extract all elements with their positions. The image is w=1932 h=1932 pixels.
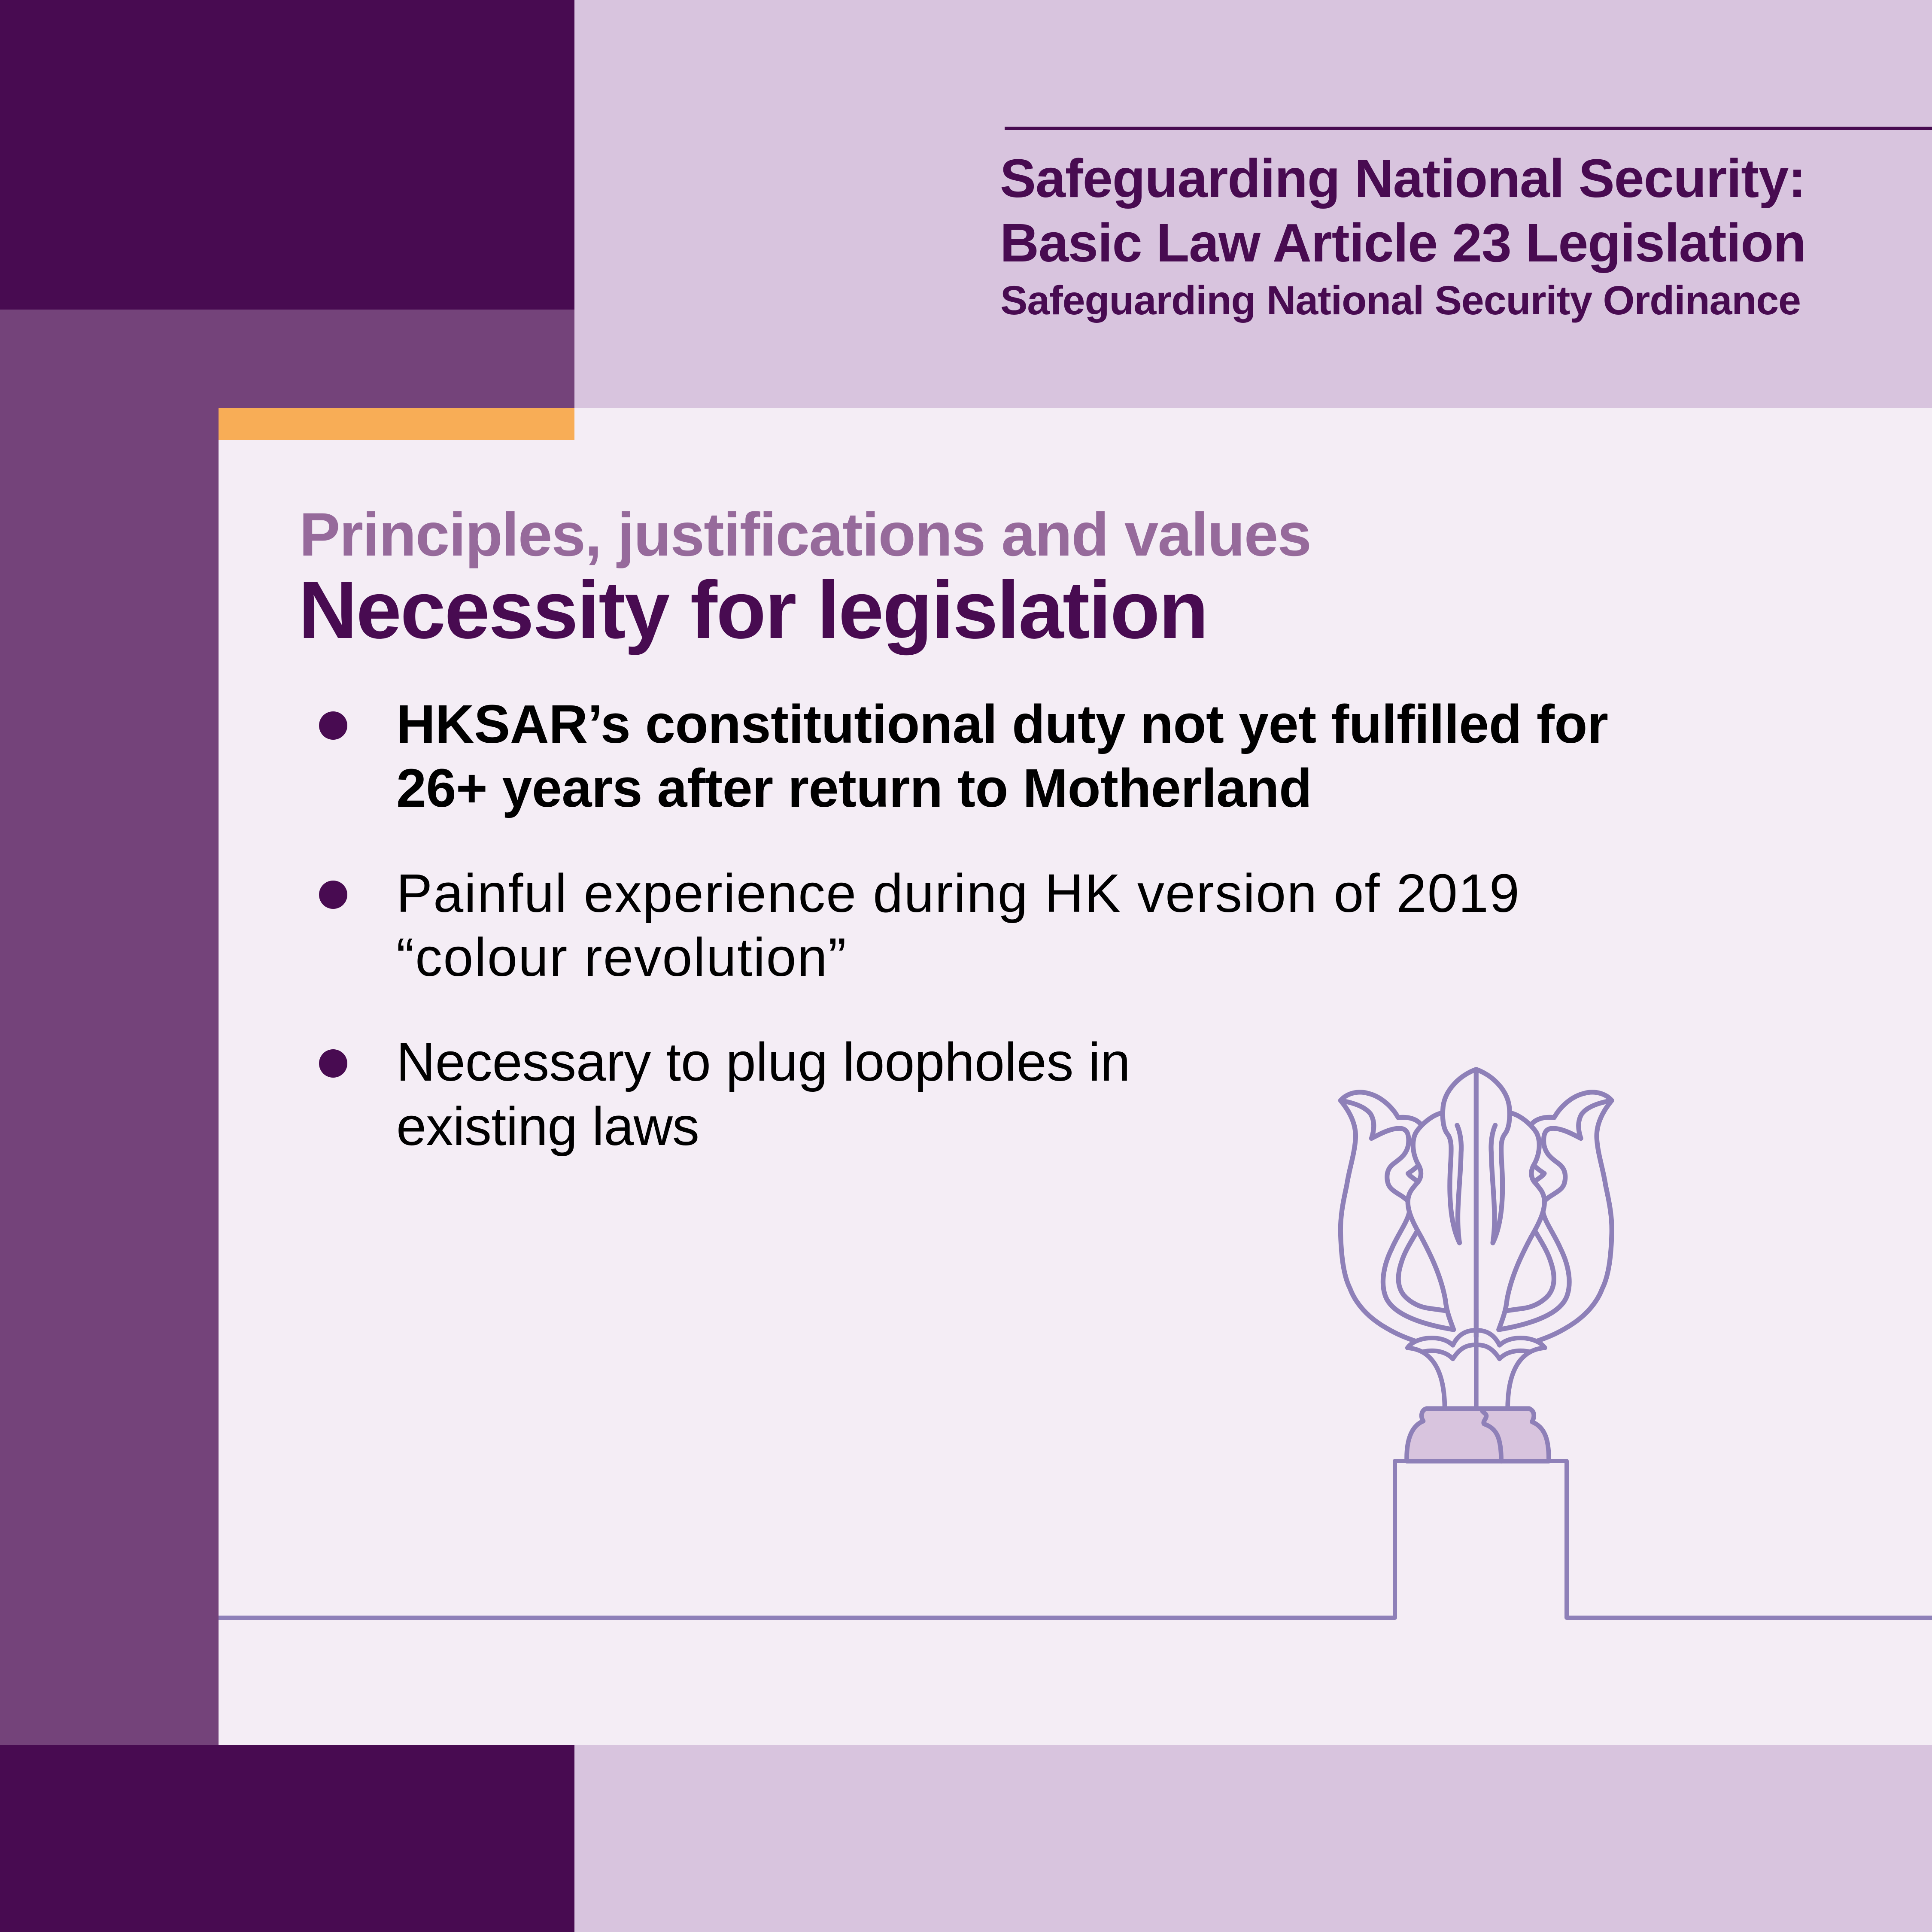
panel: main content card xyxy=(219,408,1932,1745)
panel: bottom right light background xyxy=(574,1745,1932,1932)
header title block: Safeguarding National Security: xyxy=(1000,148,1806,209)
bullet 2 text: “colour revolution” xyxy=(396,927,846,987)
bullet 3 text: Necessary to plug loopholes in xyxy=(396,1032,1130,1092)
ground line with pedestal xyxy=(219,1461,1932,1618)
section heading: Necessity for legislation xyxy=(298,565,1209,656)
bullet 1 text: HKSAR’s constitutional duty not yet fulfilled for xyxy=(396,694,1608,754)
bullet 1 text: 26+ years after return to Motherland xyxy=(396,758,1312,818)
section subtitle: Principles, justifications and values xyxy=(299,501,1312,569)
icon: bauhinia sculpture xyxy=(1340,1069,1612,1461)
bullet 2 text xyxy=(396,863,1519,987)
sculpture base xyxy=(1407,1309,1549,1461)
panel: mid purple frame xyxy=(0,310,574,1745)
bullet 2 text: Painful experience during HK version of 2019 xyxy=(396,863,1519,923)
panel: top left dark block xyxy=(0,0,574,310)
orange accent bar xyxy=(219,408,574,440)
header title block: Basic Law Article 23 Legislation xyxy=(1000,213,1806,273)
bullet 3 text: existing laws xyxy=(396,1096,699,1157)
panel: bottom left dark block xyxy=(0,1745,574,1932)
header rule xyxy=(1005,127,1932,130)
bullet 2 marker xyxy=(319,881,347,909)
bullet list xyxy=(319,694,1608,1157)
header title block: Safeguarding National Security Ordinance xyxy=(1000,278,1801,323)
header title block xyxy=(1000,148,1806,323)
bullet 1 text xyxy=(396,694,1608,818)
bullet 3 marker xyxy=(319,1049,347,1078)
panel: top right light background xyxy=(574,0,1932,408)
bullet 1 marker xyxy=(319,711,347,740)
bullet 3 text xyxy=(396,1032,1130,1157)
sculpture petals xyxy=(1340,1069,1612,1341)
